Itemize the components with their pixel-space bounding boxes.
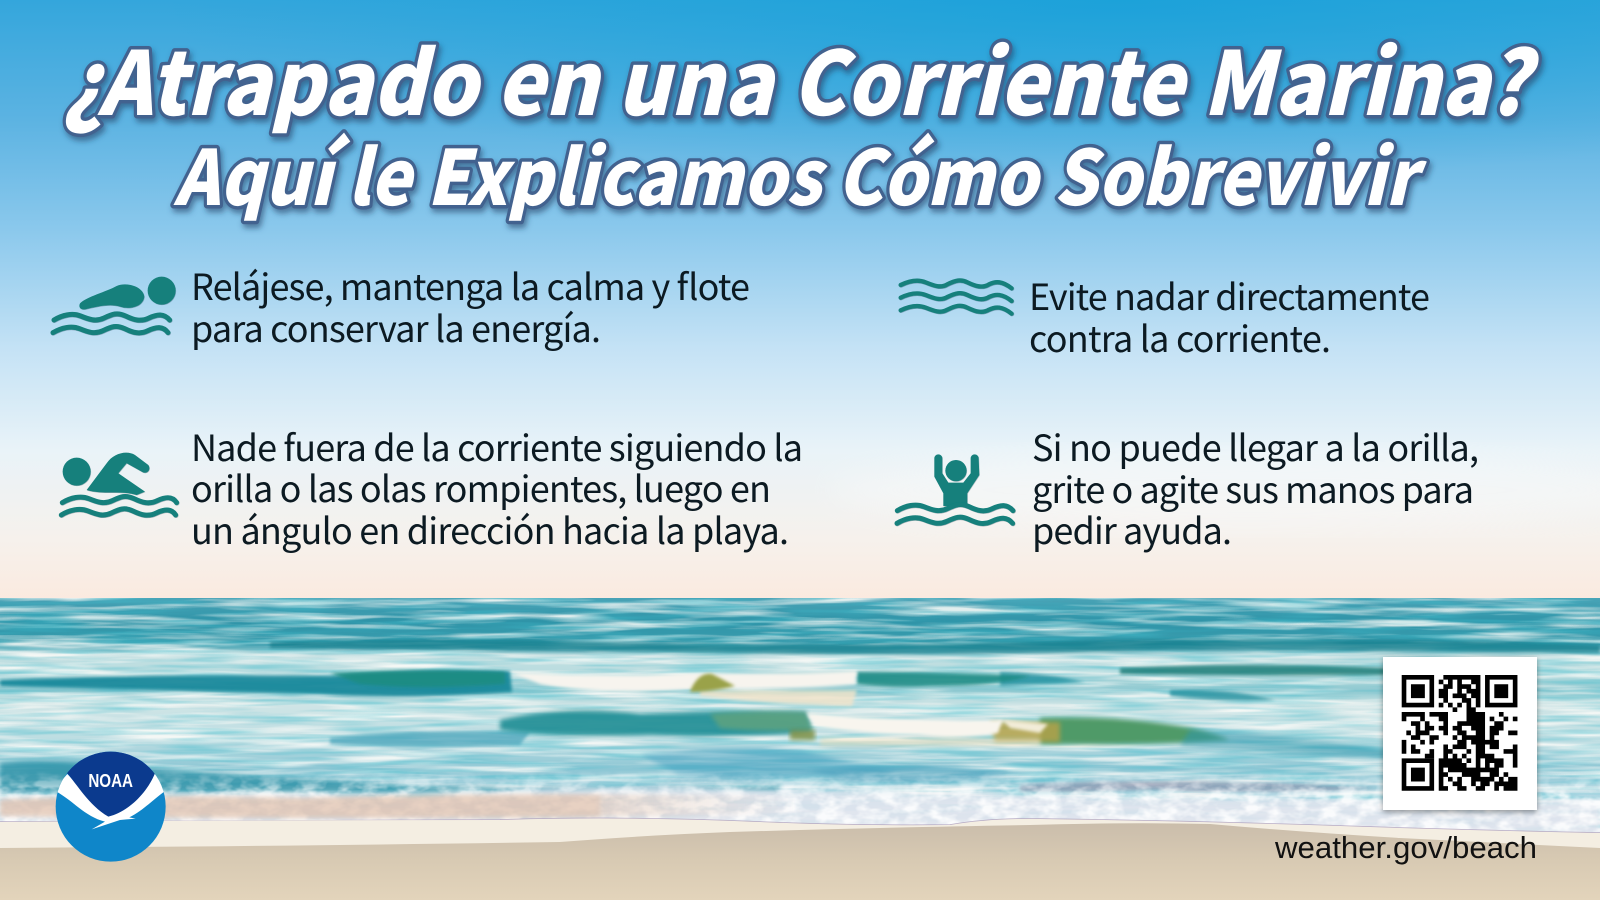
second wave teal shoulder (500, 710, 812, 736)
tip text two: contra la corriente. (1029, 311, 1331, 363)
far swell band (270, 639, 1600, 654)
breaking wave crest one (510, 671, 857, 691)
breaking wave crest two (806, 713, 1003, 737)
tip text four: Si no puede llegar a la orilla, (1032, 420, 1479, 472)
website url: weather.gov/beach (1274, 830, 1537, 865)
title line two: Aquí le Explicamos Cómo Sobrevivir (173, 117, 1428, 227)
near swell band left (0, 670, 512, 697)
tip text three: un ángulo en dirección hacia la playa. (191, 503, 789, 555)
tip text four: grite o agite sus manos para (1032, 462, 1474, 514)
sky background (0, 0, 1600, 600)
title (63, 14, 1541, 227)
inshore blue patches (640, 748, 900, 779)
tip three: swim along the shore (61, 420, 803, 555)
second wave green shoulder (1040, 717, 1230, 744)
tip text three: Nade fuera de la corriente siguiendo la (191, 420, 803, 472)
icon: person waving for help (897, 454, 1013, 523)
tip text one: para conservar la energía. (191, 301, 601, 353)
tip text two: Evite nadar directamente (1029, 269, 1430, 321)
icon: waves (901, 280, 1012, 314)
NOAA logo: NOAA (88, 770, 133, 791)
tip text three: orilla o las olas rompientes, luego en (191, 461, 771, 513)
NOAA logo (56, 752, 166, 862)
icon: swimmer (61, 453, 177, 515)
tip text one: Relájese, mantenga la calma y flote (191, 259, 750, 311)
sea background with waves (0, 598, 1600, 838)
tip two: avoid swimming against current (901, 269, 1430, 363)
tip text four: pedir ayuda. (1032, 503, 1232, 555)
shore foam (0, 787, 1600, 838)
wet sand and beach (0, 818, 1600, 900)
QR code (1383, 657, 1537, 810)
icon: floating swimmer (53, 277, 176, 333)
tip one: float (53, 259, 750, 353)
tip four: call for help (897, 420, 1479, 555)
